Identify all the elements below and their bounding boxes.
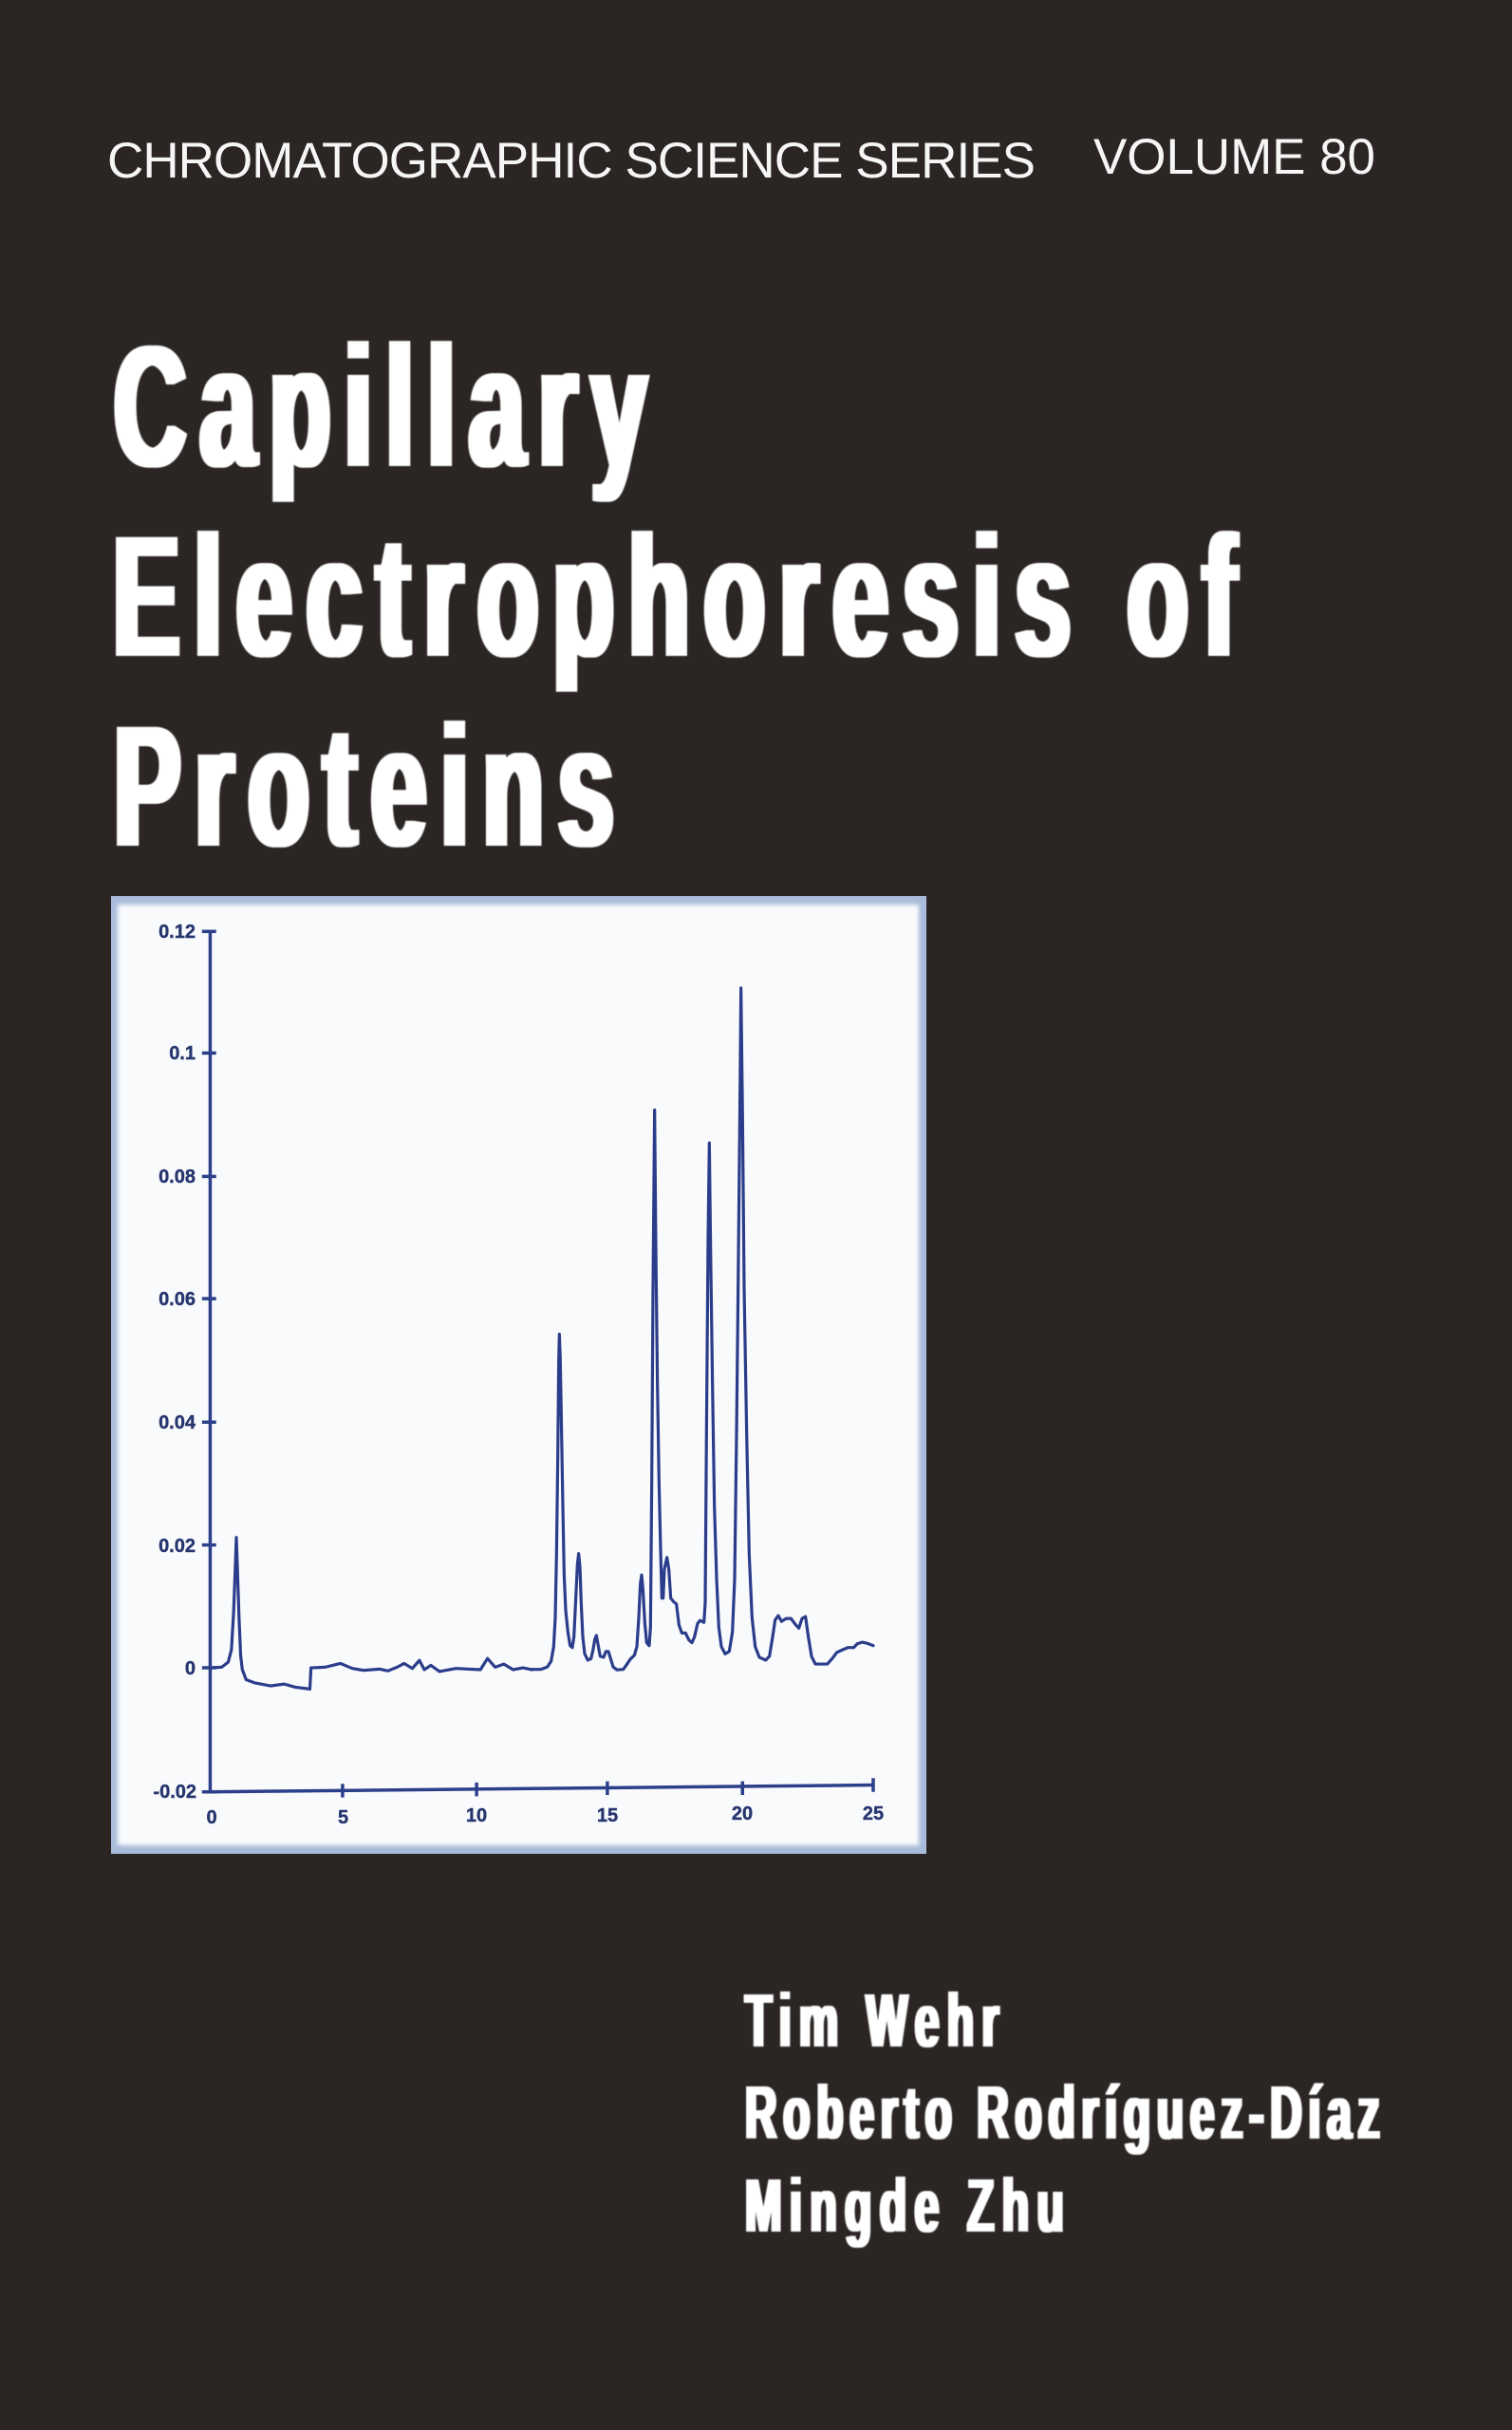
author 2: Roberto Rodríguez-Díaz: [745, 2070, 1380, 2155]
y axis labels: [153, 922, 196, 1803]
x axis labels: 15: [597, 1805, 618, 1826]
volume number: VOLUME 80: [1093, 129, 1375, 185]
authors: [745, 1978, 1380, 2248]
x axis: [210, 1778, 874, 1798]
y axis labels: 0.08: [159, 1167, 196, 1187]
title line 1: Capillary: [114, 309, 646, 503]
panel interior: [118, 905, 919, 1845]
chart: [153, 922, 884, 1828]
electropherogram trace: [210, 988, 873, 1689]
x axis labels: 0: [206, 1807, 217, 1828]
y axis labels: 0.1: [169, 1043, 196, 1064]
x axis labels: 5: [338, 1807, 348, 1828]
title line 2: Electrophoresis of: [113, 499, 1237, 693]
title line 3: Proteins: [114, 689, 614, 883]
title: [113, 309, 1237, 883]
author 3: Mingde Zhu: [745, 2163, 1064, 2248]
panel: electropherogram figure: [111, 896, 926, 1854]
x axis labels: 25: [863, 1804, 884, 1824]
x axis labels: 20: [732, 1804, 753, 1824]
author 1: Tim Wehr: [745, 1978, 999, 2063]
y axis labels: 0.12: [159, 922, 196, 943]
y axis: [202, 931, 216, 1792]
y axis labels: 0: [185, 1658, 196, 1679]
x axis labels: 10: [466, 1805, 487, 1826]
y axis labels: 0.02: [159, 1536, 196, 1557]
y axis labels: 0.04: [159, 1412, 196, 1433]
y axis labels: 0.06: [159, 1289, 196, 1310]
panel border: [111, 896, 926, 1854]
y axis labels: -0.02: [153, 1782, 196, 1803]
series name: CHROMATOGRAPHIC SCIENCE SERIES: [107, 133, 1036, 189]
x axis labels: [206, 1804, 884, 1828]
